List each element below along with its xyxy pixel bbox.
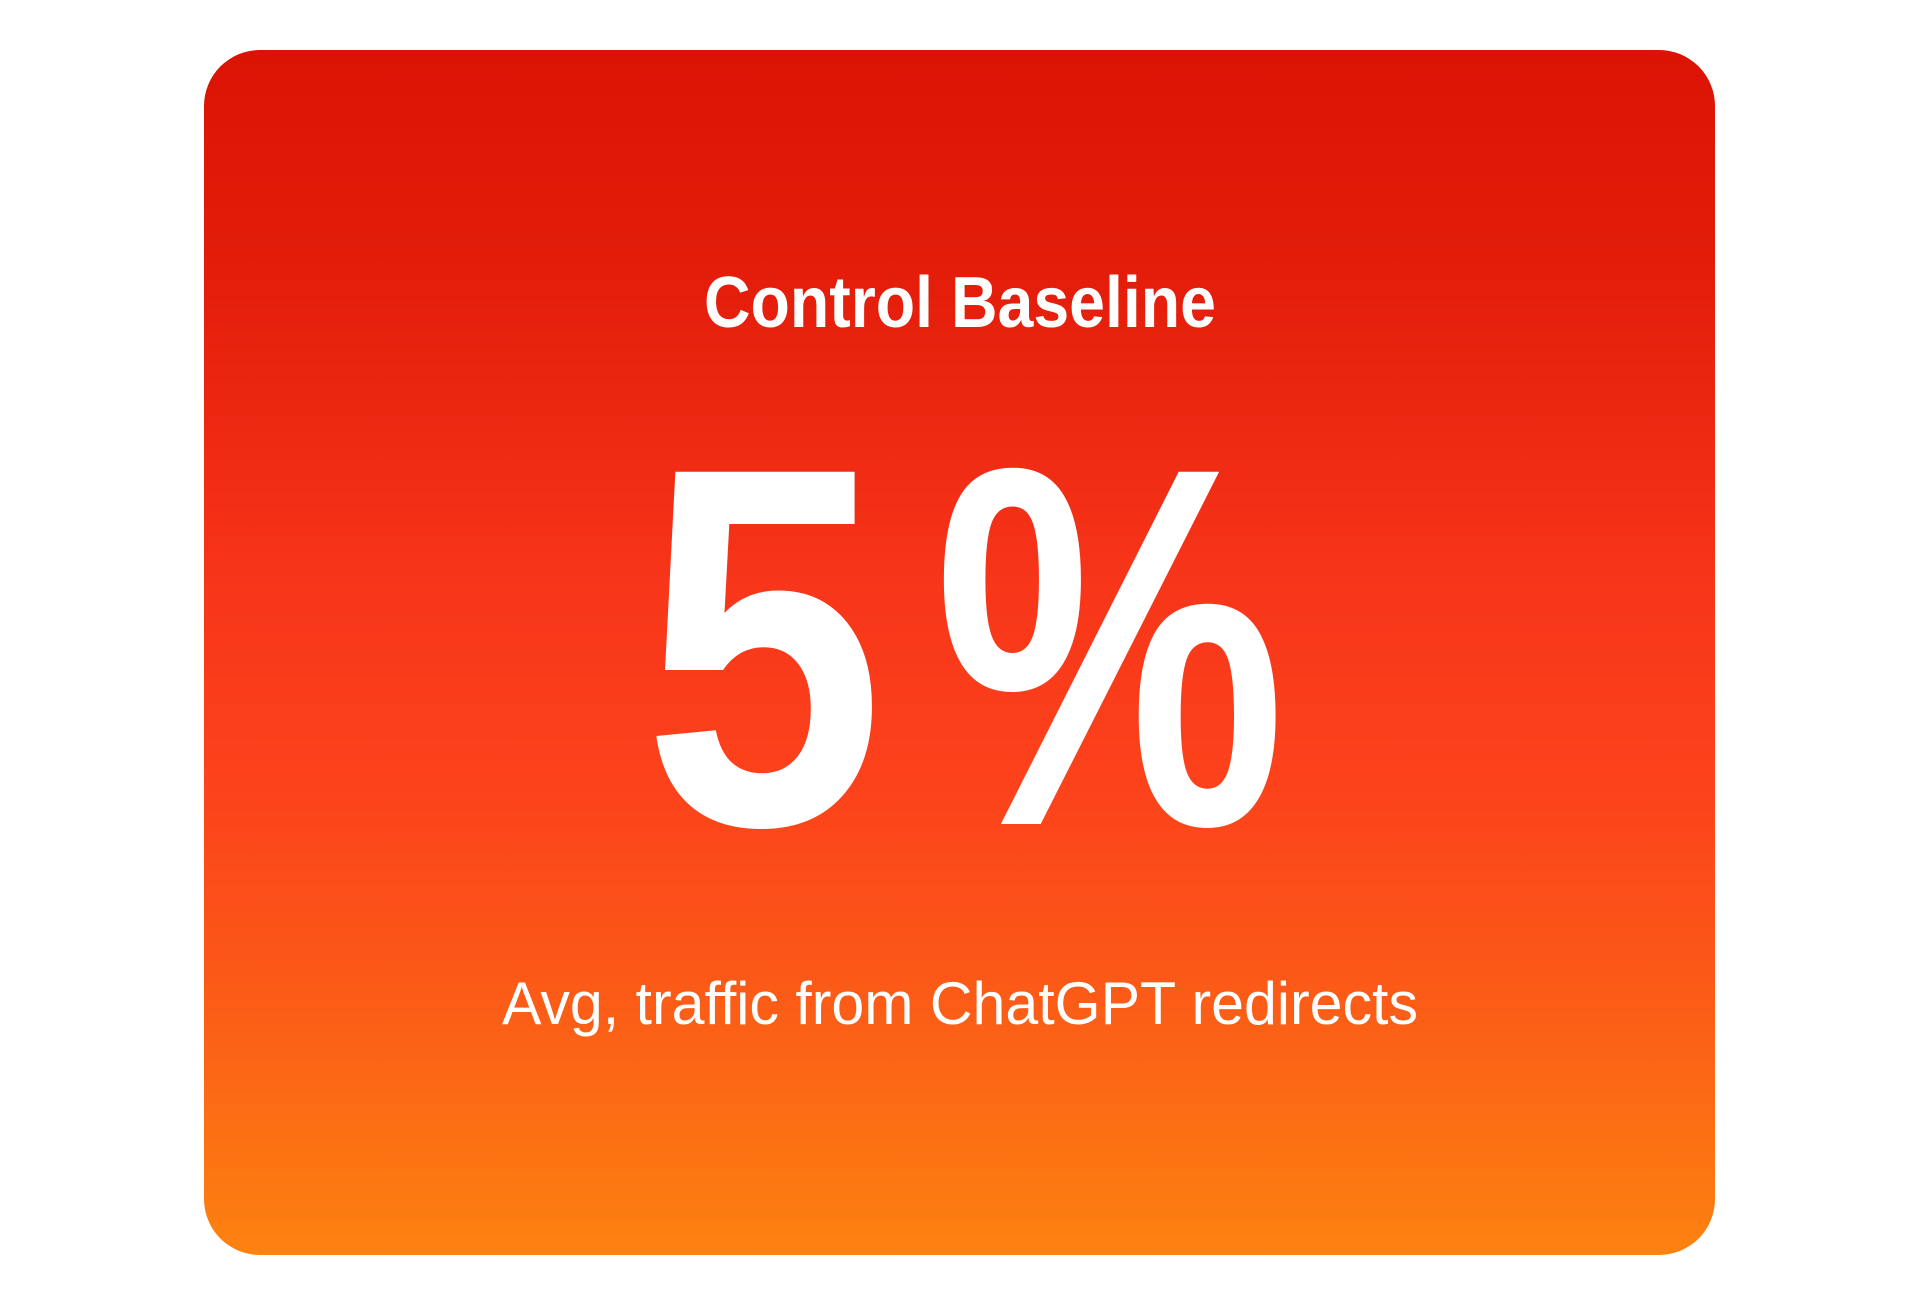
big number: 5% bbox=[643, 360, 1286, 933]
panel: control baseline card bbox=[204, 50, 1715, 1255]
big number: 5%: % bbox=[934, 360, 1286, 933]
caption: Avg. traffic from ChatGPT redirects: Avg, traffic from ChatGPT redirects bbox=[502, 970, 1418, 1037]
big number: 5%: 5 bbox=[643, 360, 884, 933]
heading: Control Baseline: Control Baseline bbox=[704, 263, 1216, 343]
